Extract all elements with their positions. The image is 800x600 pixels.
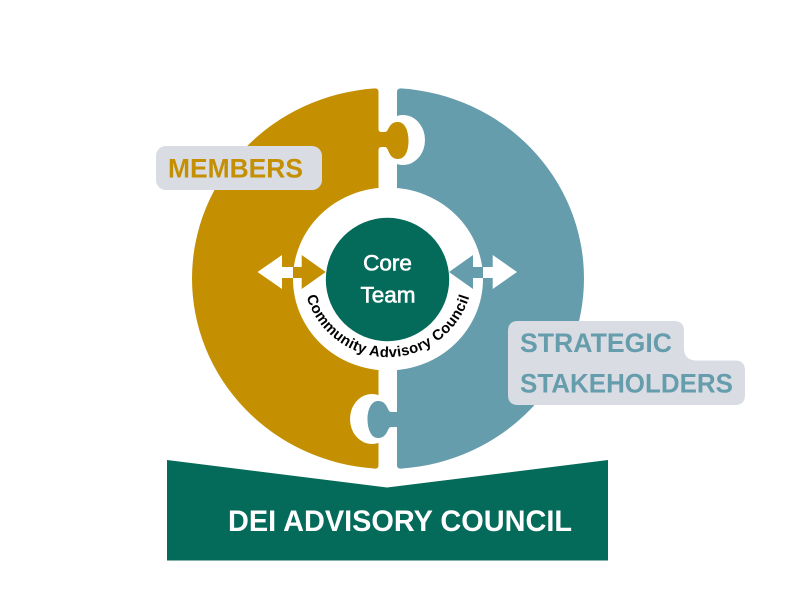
- members label: MEMBERS: [168, 154, 303, 184]
- core team circle: Team: [360, 282, 416, 308]
- banner: DEI advisory council: [167, 460, 608, 560]
- strategic stakeholders label: [508, 321, 745, 405]
- right half: strategic stakeholders puzzle piece: [381, 88, 584, 469]
- strategic stakeholders label: STAKEHOLDERS: [520, 368, 733, 398]
- bottom puzzle tab: [368, 401, 398, 438]
- left half: members puzzle piece: [192, 88, 408, 469]
- banner: DEI advisory council: DEI ADVISORY COUNCIL: [228, 505, 572, 538]
- community advisory council ring: [293, 188, 483, 370]
- strategic stakeholders label: STRATEGIC: [520, 328, 672, 358]
- arrow: members to core team: [258, 255, 326, 289]
- core team label: Core: [363, 250, 412, 276]
- curved label: community advisory council: Community Advisory Council: [308, 294, 470, 358]
- arrow: stakeholders to core team: [449, 255, 517, 289]
- core team circle: [326, 218, 449, 341]
- members label: [156, 146, 322, 190]
